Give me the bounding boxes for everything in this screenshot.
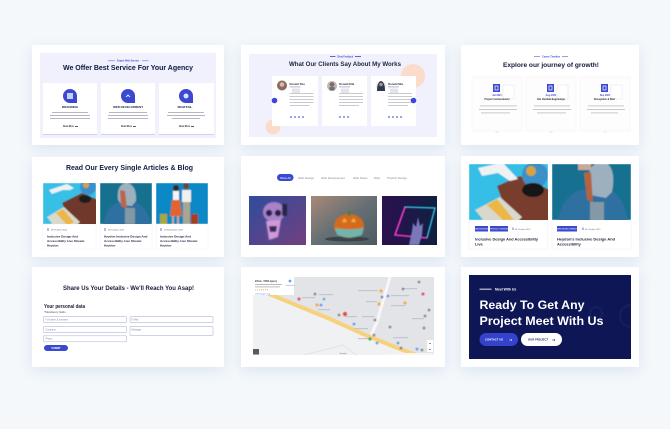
journey card 1: Project Commencement — [484, 97, 510, 101]
map info box: InPixio - TODO Agency — [255, 279, 277, 283]
blog card 3 — [156, 183, 208, 249]
carousel arrow left — [272, 98, 277, 103]
form placeholders: Message — [132, 328, 142, 332]
journey card 3 — [580, 77, 630, 134]
article card 1: WEB DESIGN — [475, 228, 488, 230]
journey card 2 — [526, 77, 576, 134]
testimonial card 2: Ronald Ella — [339, 82, 355, 86]
form placeholders — [46, 318, 142, 341]
service card 2: Read More — [121, 124, 132, 128]
service card 3: DIGITAL — [178, 105, 193, 109]
testimonial card 3 — [371, 76, 416, 126]
journey card 2: Our Humble Beginnings — [537, 97, 565, 101]
banner heading — [480, 298, 604, 328]
button: contact us — [480, 333, 518, 346]
blog card 1: Inclusive Design And — [47, 234, 78, 238]
map info box: View larger map — [255, 292, 272, 296]
image: travellers — [156, 183, 208, 224]
panel: journey — [461, 45, 639, 149]
filter tabs: Web Development — [321, 176, 345, 180]
map thumbnail — [253, 349, 259, 354]
image: neon skull — [249, 196, 306, 245]
form placeholders: E-Mail — [132, 318, 139, 322]
testimonial card 3: Ronald Mia — [388, 82, 403, 86]
panel: blog articles — [32, 157, 224, 261]
testimonial card 2 — [322, 76, 367, 126]
filter tabs: Show All — [280, 176, 291, 180]
button: contact us: CONTACT US — [485, 338, 503, 342]
form placeholders: Full name & surname — [46, 318, 69, 322]
journey eyebrow: Career Timeline — [542, 54, 560, 58]
blog card 2: 08 October 2021 — [108, 228, 125, 232]
filter tabs: Web — [374, 176, 380, 180]
filter tabs: Web Design — [298, 176, 314, 180]
decorative peach circles — [266, 64, 425, 134]
blog card 3: Heydon — [160, 244, 171, 248]
testimonial card 1: Ronald Rex — [290, 82, 305, 86]
panel: blog detail cards — [461, 156, 639, 261]
article card 2: Accessibility — [557, 242, 582, 246]
services eyebrow: Expert Web Service — [117, 58, 139, 62]
map info box: 4.9 ★★★★★ — [255, 288, 268, 292]
blog card 3: Inclusive Design And — [160, 234, 191, 238]
services heading: We Offer Best Service For Your Agency — [63, 63, 193, 72]
panel: call to action — [461, 267, 642, 371]
service card 1 — [43, 83, 97, 135]
article card 2: Heydon's Inclusive Design And — [557, 236, 616, 242]
form placeholders: Company — [46, 328, 57, 332]
blog card 1: Accessibility Live Stream — [47, 239, 85, 243]
article card 1: PRODUCT DESIGN — [490, 228, 509, 230]
button: our project: OUR PROJECT — [528, 338, 548, 342]
filter tabs — [277, 174, 407, 181]
journey card 1 — [472, 77, 522, 134]
navy banner — [469, 275, 631, 359]
article card 2: WEB DEVELOPMENT — [557, 228, 578, 230]
banner heading: Project Meet With Us — [480, 314, 604, 328]
map — [253, 277, 434, 357]
panel: portfolio — [241, 156, 445, 261]
map info box — [253, 277, 294, 296]
testimonials eyebrow: Client Feedback — [337, 54, 353, 58]
blog card 2: Heydon Inclusive Design And — [104, 234, 147, 238]
blog card 1 — [43, 179, 98, 249]
blog card 2: Heydon — [104, 244, 115, 248]
services eyebrow — [108, 58, 148, 62]
blog heading: Read Our Every Single Articles & Blog — [66, 165, 193, 172]
journey card 2: Aug 2021 — [546, 94, 557, 97]
image: passport and globe — [43, 183, 96, 224]
submit button — [44, 345, 68, 351]
map info box: Directions — [286, 284, 294, 287]
service card 1: BRANDING — [62, 105, 79, 109]
testimonials heading: What Our Clients Say About My Works — [289, 61, 401, 68]
filter tabs: Product Design — [387, 176, 407, 180]
image: neon frame and hand — [382, 196, 437, 245]
article card 1: Live — [475, 242, 484, 246]
map zoom controls — [427, 340, 433, 352]
journey card 3: Recognition & Start — [594, 97, 615, 101]
blog card 2 — [100, 183, 152, 249]
map place labels — [302, 288, 424, 339]
filter tabs: Web Notes — [353, 176, 368, 180]
carousel arrow right — [411, 98, 416, 103]
decorative dotted rings — [589, 304, 630, 328]
article card 1: Inclusive Design And Accessibility — [475, 236, 539, 242]
required note: *Mandatory fields — [44, 310, 66, 314]
article card 1 — [469, 162, 550, 249]
form placeholders: Phone — [46, 338, 53, 341]
banner eyebrow: Meet With Us — [495, 288, 516, 292]
banner eyebrow — [480, 288, 516, 292]
blog card 2: Accessibility Live Stream — [104, 239, 142, 243]
image: woman in hoodie large — [552, 164, 631, 222]
service card 3: Read More — [179, 124, 190, 128]
testimonial card 1 — [272, 76, 318, 126]
button: our project — [521, 333, 562, 346]
blog card 3: 24 September 2021 — [164, 228, 184, 232]
article card 1: 08 October 2021 — [515, 228, 531, 231]
blog card 1: Heydon — [47, 244, 58, 248]
journey card 3: Sep 2021 — [600, 94, 611, 97]
form heading: Share Us Your Details - We'll Reach You Asap! — [63, 285, 194, 292]
article card 2 — [552, 164, 631, 249]
blog card 3: Accessibility Live Stream — [160, 239, 198, 243]
form subheading: Your personal data — [44, 304, 85, 310]
map pins — [298, 281, 430, 351]
submit button: SUBMIT — [51, 347, 61, 350]
article card 2: 08 October 2021 — [585, 228, 601, 231]
map attribution: Google — [339, 353, 347, 355]
panel: testimonials — [241, 45, 445, 149]
journey card 1: Jul 2021 — [492, 94, 502, 97]
panel: map — [241, 267, 445, 371]
panel: contact form — [32, 267, 224, 371]
service card 2: WEB DEVELOPMENT — [113, 105, 143, 109]
banner heading: Ready To Get Any — [480, 298, 585, 312]
journey heading: Explore our journey of growth! — [503, 62, 599, 69]
service card 2 — [101, 83, 155, 135]
image: woman in hoodie — [100, 183, 152, 226]
journey eyebrow — [534, 54, 568, 58]
image: passport and globe large — [469, 162, 550, 222]
panel: services — [32, 45, 224, 149]
blog card 1: 08 October 2021 — [51, 228, 68, 232]
form fields — [44, 316, 213, 342]
service card 1: Read More — [63, 124, 74, 128]
service card 3 — [159, 83, 214, 135]
image: pumpkin with mask — [311, 196, 377, 245]
map attribution — [339, 353, 434, 355]
